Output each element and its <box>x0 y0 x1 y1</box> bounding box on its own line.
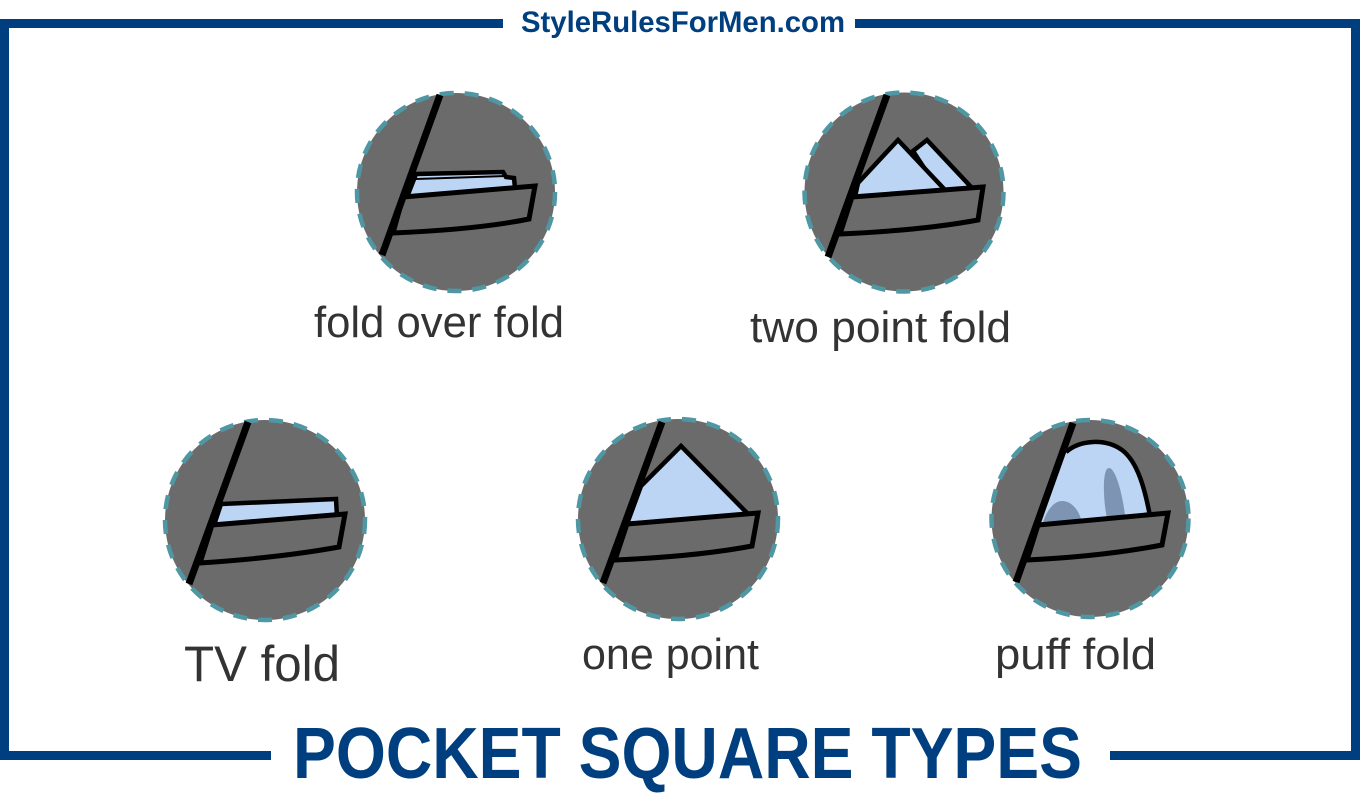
label: two point fold: two point fold <box>750 303 1011 352</box>
label: fold over fold: fold over fold <box>314 298 564 347</box>
icon: puff fold <box>992 420 1188 617</box>
icon: fold over fold <box>357 93 555 291</box>
label: TV fold: TV fold <box>184 636 340 692</box>
label: one point: one point <box>582 630 759 679</box>
site name heading: StyleRulesForMen.com <box>521 6 845 39</box>
title: POCKET SQUARE TYPES <box>293 714 1082 794</box>
label: puff fold: puff fold <box>995 630 1156 679</box>
icon: one point <box>578 419 778 619</box>
icon: TV fold <box>165 420 365 620</box>
icon: two point fold <box>804 92 1004 292</box>
